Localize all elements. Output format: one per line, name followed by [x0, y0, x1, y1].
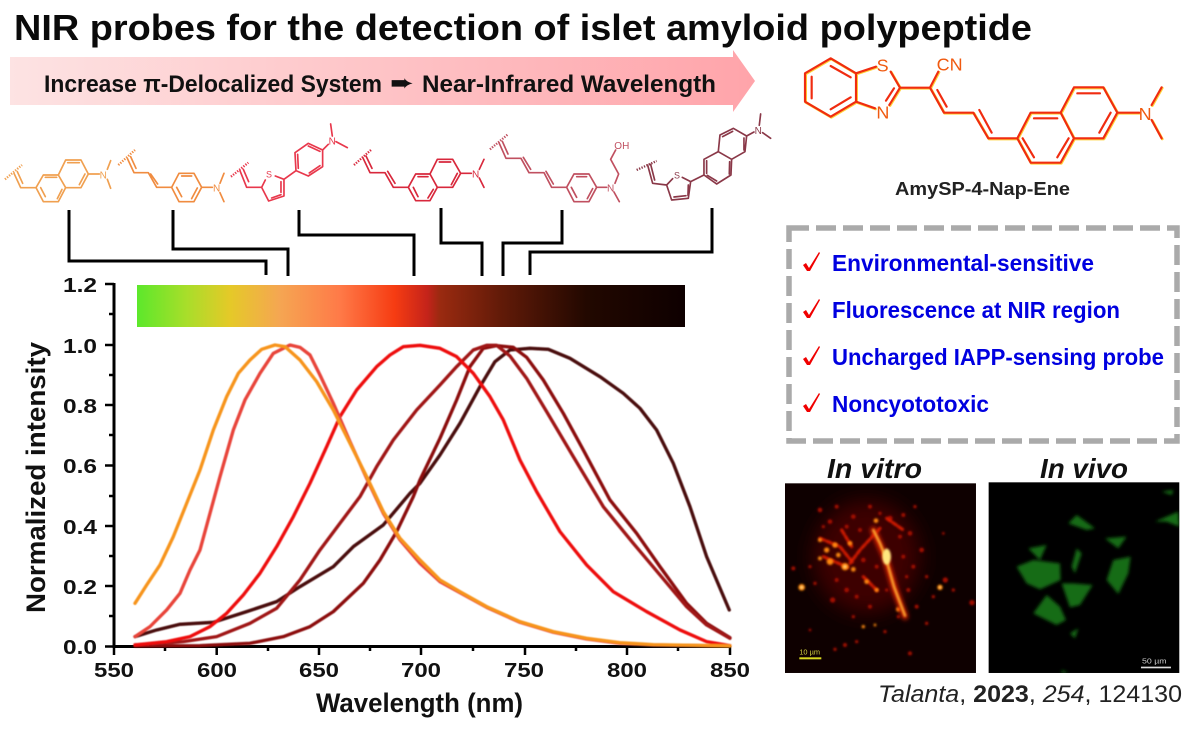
title: NIR probes for the detection of islet amyloid polypeptide — [14, 7, 1032, 48]
molecule 4: red naphthalene diene: N — [472, 169, 479, 180]
panel: properties checklist — [789, 228, 1177, 441]
molecule 5: triene benzene with hydroxyethyl — [490, 134, 629, 202]
molecule 3: crimson thiophene phenyl: N — [329, 137, 336, 148]
heading: in vivo: In vivo — [1040, 453, 1128, 484]
scale bar: 50 µm: 50 µm — [1142, 658, 1167, 665]
y tick labels: 0.4 — [63, 517, 98, 539]
molecule 5: triene benzene with hydroxyethyl: OH — [614, 141, 629, 152]
image: in vivo fluorescence micrograph — [989, 482, 1179, 673]
y tick labels: 1.2 — [63, 275, 97, 297]
main structure: AmySP-4-Nap-Ene: CN — [937, 55, 963, 75]
x tick labels — [94, 660, 750, 682]
image: in vitro fluorescence micrograph — [785, 483, 976, 673]
spectral curves — [135, 345, 730, 646]
x tick labels: 800 — [607, 660, 647, 682]
molecule 3: crimson thiophene phenyl — [231, 124, 347, 201]
molecule 1: orange naphthalene — [5, 160, 111, 202]
chart: normalized emission spectra — [21, 275, 750, 718]
molecule 6: dark thiophene naphthalene: S — [674, 171, 680, 181]
molecule 5: triene benzene with hydroxyethyl: N — [607, 183, 614, 194]
arrow banner: increase delocalization to NIR wavelength: Increase π-Delocalized System — [44, 71, 382, 98]
axes and ticks — [113, 283, 731, 648]
y tick labels: 0.2 — [63, 577, 97, 599]
item: environmental-sensitive: Environmental-sensitive — [832, 250, 1094, 276]
molecule 2: orange benzene diene — [118, 150, 224, 202]
item: uncharged probe: Uncharged IAPP-sensing probe — [832, 344, 1164, 370]
color bar — [137, 285, 685, 327]
heading: in vitro: In vitro — [827, 453, 922, 484]
y tick labels: 0.0 — [63, 637, 97, 659]
main structure: AmySP-4-Nap-Ene: N — [1139, 104, 1152, 124]
y axis title: Normalized intensity — [21, 342, 51, 613]
y tick labels: 0.8 — [63, 396, 97, 418]
x tick labels: 650 — [299, 660, 339, 682]
scale bar: 10 µm: 10 µm — [799, 649, 820, 656]
arrow banner: increase delocalization to NIR wavelength: Near-Infrared Wavelength — [422, 71, 716, 98]
item: noncytotoxic: Noncyototoxic — [832, 391, 989, 417]
x tick labels: 550 — [94, 660, 134, 682]
y tick labels: 0.6 — [63, 456, 97, 478]
main structure: AmySP-4-Nap-Ene: N — [876, 103, 889, 123]
molecule 2: orange benzene diene: N — [213, 183, 220, 194]
compound name: AmySP-4-Nap-Ene — [895, 179, 1070, 199]
arrow banner: increase delocalization to NIR wavelength: ➨ — [390, 69, 414, 97]
citation: Talanta, 2023, 254, 124130 — [878, 681, 1182, 708]
molecule 1: orange naphthalene: N — [100, 170, 107, 181]
x axis title: Wavelength (nm) — [316, 688, 523, 718]
x tick labels: 600 — [197, 660, 237, 682]
molecule 6: dark thiophene naphthalene: N — [755, 126, 762, 137]
item: fluorescence at NIR: Fluorescence at NIR region — [832, 297, 1120, 323]
main structure: AmySP-4-Nap-Ene: S — [877, 56, 889, 76]
scale bar: 10 µm — [799, 649, 821, 659]
scale bar: 50 µm — [1141, 658, 1171, 668]
molecule 3: crimson thiophene phenyl: S — [266, 169, 272, 179]
molecule 4: red naphthalene diene — [354, 149, 484, 201]
y tick labels: 1.0 — [63, 336, 97, 358]
x tick labels: 850 — [710, 660, 750, 682]
x tick labels: 750 — [504, 660, 544, 682]
molecule 6: dark thiophene naphthalene — [637, 114, 771, 200]
y tick labels — [63, 275, 98, 659]
x tick labels: 700 — [401, 660, 441, 682]
main structure: AmySP-4-Nap-Ene — [805, 55, 1162, 199]
leader lines linking structures to curves — [69, 208, 712, 276]
arrow banner: increase delocalization to NIR wavelength — [10, 50, 755, 112]
